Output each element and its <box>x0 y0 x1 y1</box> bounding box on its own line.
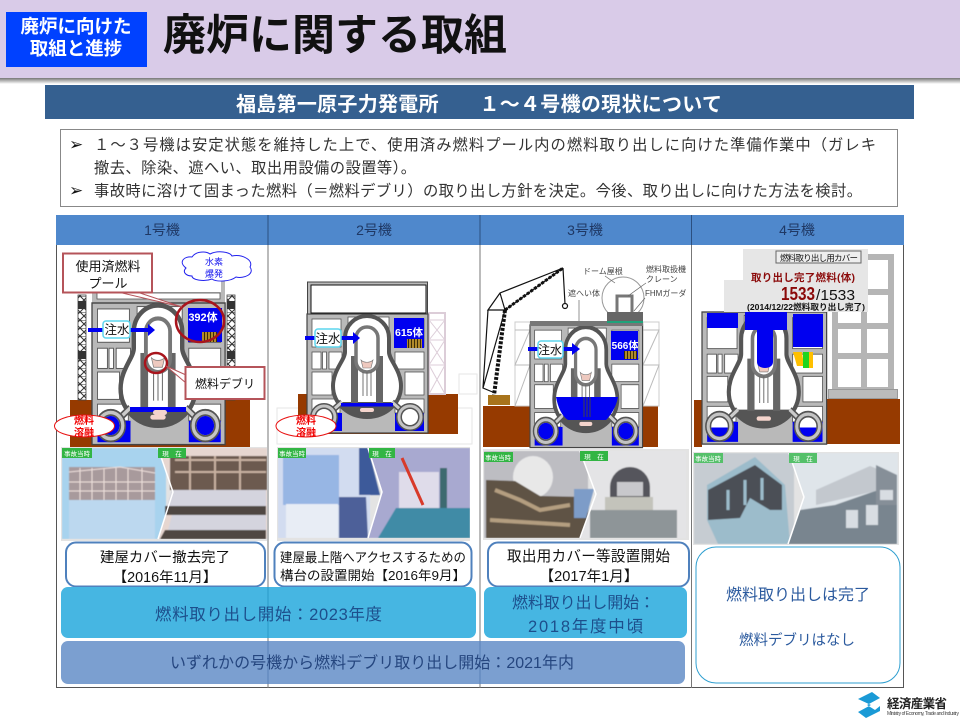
fuel meltdown oval: 燃料 <box>74 414 94 427</box>
diagram labels <box>568 264 686 321</box>
summary text box: ➢ <box>69 181 83 200</box>
unit 4 completion box: 燃料デブリはなし <box>739 631 855 649</box>
callout: spent fuel pool <box>63 254 182 307</box>
diagram labels: FHMガーダ <box>645 288 686 298</box>
spent fuel pool 392 <box>188 308 222 342</box>
status table frame <box>56 215 904 688</box>
side scaffolding <box>429 313 445 394</box>
empty upper floor <box>308 282 428 314</box>
unit 4 completion box <box>696 547 900 683</box>
unit 2 milestone: 建屋最上階へアクセスするための <box>280 550 466 565</box>
METI logo: Ministry of Economy, Trade and Industry <box>887 711 960 717</box>
fuel meltdown oval: 燃料 <box>296 414 316 427</box>
water injection: 注水 <box>104 323 130 337</box>
unit 3 fuel removal start: 燃料取り出し開始： <box>512 594 655 612</box>
METI logo: 経済産業省 <box>887 696 947 711</box>
unit 4 photos: 事故当時 <box>695 454 722 463</box>
crane <box>483 268 568 403</box>
summary text box: ➢ <box>69 135 83 154</box>
neighbouring frame <box>835 257 891 390</box>
summary text box <box>60 130 898 206</box>
hydrogen explosion cloud <box>182 252 251 281</box>
units 1-2 fuel removal start: 燃料取り出し開始：2023年度 <box>155 605 382 624</box>
unit 1 reactor diagram <box>54 252 264 447</box>
unit 3 reactor diagram <box>483 264 686 448</box>
subtitle bar: 福島第一原子力発電所 １～４号機の現状について <box>236 93 722 116</box>
fuel removal status panel: /1533 <box>816 287 855 304</box>
fuel debris removal start: いずれかの号機から燃料デブリ取り出し開始：2021年内 <box>170 653 574 672</box>
unit 2 photos <box>277 447 470 541</box>
diagram labels: 燃料取扱機 <box>646 264 686 274</box>
table header row: 2号機 <box>356 222 392 238</box>
spent fuel pool 566: 566体 <box>612 339 638 352</box>
section tag <box>6 12 147 67</box>
table header row <box>56 215 904 245</box>
fuel removal status panel: 取り出し完了燃料(体) <box>751 271 855 284</box>
fuel removal status panel: 燃料取り出し用カバー <box>780 253 858 263</box>
water injection <box>88 321 155 338</box>
unit 1 milestone: 建屋カバー撤去完了 <box>100 549 230 566</box>
unit 4 photos <box>693 452 899 545</box>
callout: spent fuel pool: 使用済燃料 <box>75 259 141 274</box>
unit 1 photos: 事故当時 <box>64 449 90 458</box>
METI logo <box>858 692 960 718</box>
spent fuel pool 615 <box>394 318 424 348</box>
subtitle bar <box>45 85 914 119</box>
unit 4 reactor diagram <box>694 249 900 447</box>
unit 3 photos: 事故当時 <box>485 453 512 462</box>
water injection: 注水 <box>315 332 341 346</box>
diagram labels: 遮へい体 <box>568 288 600 298</box>
summary text box: 撤去、除染、遮へい、取出用設備の設置等）。 <box>94 159 416 177</box>
red markers <box>145 300 224 373</box>
fuel removal status panel: 1533 <box>781 284 815 304</box>
callout: spent fuel pool: プール <box>88 276 128 291</box>
fuel handling cover <box>602 277 644 323</box>
unit 1 photos <box>61 447 267 541</box>
unit 2 photos: 事故当時 <box>279 449 306 458</box>
section tag: 取組と進捗 <box>30 38 122 59</box>
fuel meltdown oval <box>54 414 114 439</box>
units 1-2 fuel removal start <box>61 587 476 638</box>
scaffolding <box>78 295 235 400</box>
unit 3 fuel removal start <box>484 587 687 638</box>
unit 4 photos: 現 在 <box>793 454 813 463</box>
spent fuel pool 566 <box>611 331 638 360</box>
fuel meltdown oval: 溶融 <box>74 426 94 439</box>
unit 3 photos <box>483 449 689 540</box>
unit 1 milestone <box>66 542 265 586</box>
unit 3 milestone: 取出用カバー等設置開始 <box>507 547 670 565</box>
table header row: 3号機 <box>567 222 603 238</box>
unit 2 milestone: 構台の設置開始【2016年9月】 <box>280 568 466 583</box>
table header row: 4号機 <box>779 222 815 238</box>
table header row: 1号機 <box>144 222 180 238</box>
fuel meltdown oval: 溶融 <box>296 426 316 439</box>
spent fuel pool 615: 615体 <box>395 326 424 339</box>
spent fuel pool 392: 392体 <box>188 310 218 324</box>
callout: fuel debris: 燃料デブリ <box>195 376 255 391</box>
diagram labels: ドーム屋根 <box>583 266 623 276</box>
unit 1 milestone: 【2016年11月】 <box>113 569 217 586</box>
summary text box: １～３号機は安定状態を維持した上で、使用済み燃料プール内の燃料取り出しに向けた準備作業中（ガレキ <box>94 136 876 154</box>
unit 3 milestone <box>488 542 689 586</box>
fuel meltdown oval <box>276 414 336 439</box>
header band <box>0 0 960 84</box>
unit 3 milestone: 【2017年1月】 <box>540 568 638 585</box>
fuel removal status panel <box>724 249 868 312</box>
water injection: 注水 <box>538 343 562 357</box>
hydrogen explosion cloud: 爆発 <box>205 268 223 279</box>
unit 2 reactor diagram <box>276 282 477 444</box>
water injection <box>528 341 580 358</box>
summary text box: 事故時に溶けて固まった燃料（＝燃料デブリ）の取り出し方針を決定。今後、取り出しに向けた方法を検討。 <box>94 182 862 200</box>
title: 廃炉に関する取組 <box>163 12 507 60</box>
fuel removal status panel: (2014/12/22燃料取り出し完了) <box>747 302 865 312</box>
callout: fuel debris <box>166 366 264 399</box>
unit 2 photos: 現 在 <box>372 449 392 458</box>
diagram labels: クレーン <box>646 275 678 284</box>
unit 1 photos: 現 在 <box>162 449 182 458</box>
unit 3 photos: 現 在 <box>584 452 604 461</box>
unit 3 fuel removal start: 2018年度中頃 <box>528 617 644 636</box>
section tag: 廃炉に向けた <box>20 16 132 37</box>
unit 4 completion box: 燃料取り出しは完了 <box>726 586 870 604</box>
fuel debris removal start <box>61 641 685 684</box>
unit 2 milestone <box>274 542 472 586</box>
side scaffolding <box>515 322 659 406</box>
hydrogen explosion cloud: 水素 <box>205 256 223 267</box>
water injection <box>305 329 360 347</box>
